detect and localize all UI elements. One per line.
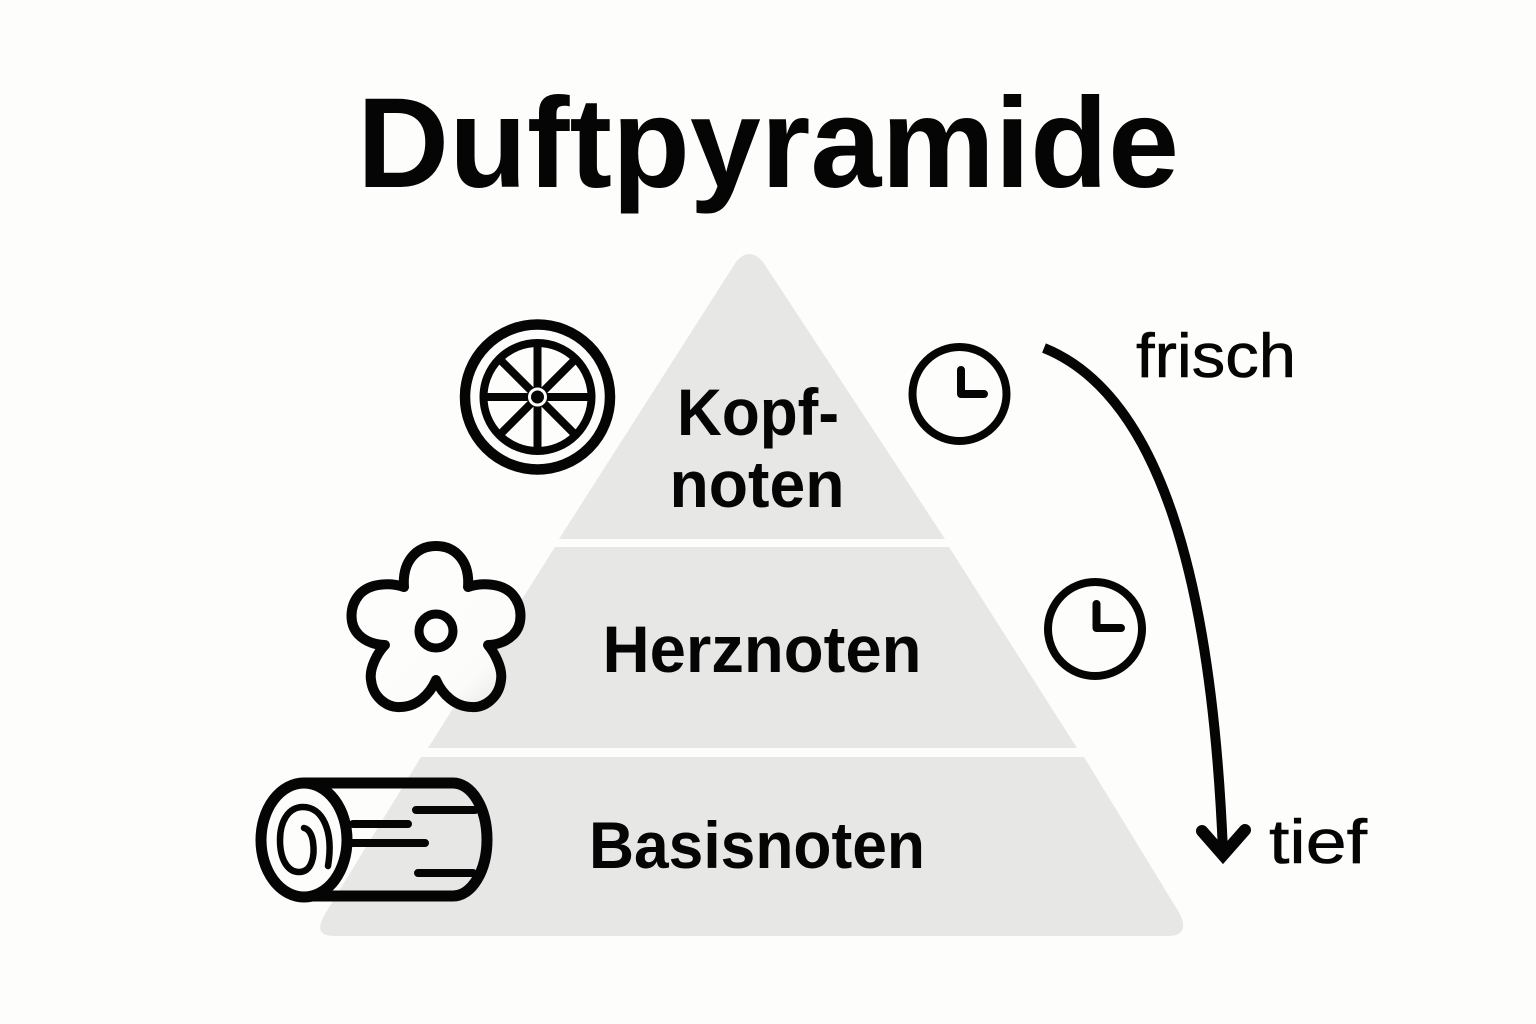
pyramid tier: Kopfnoten — [559, 254, 945, 539]
icon: clock middle — [1048, 582, 1142, 676]
icon: wood log — [261, 783, 487, 897]
pyramid tier: Herznoten — [428, 547, 1077, 748]
label: frisch: frisch — [1136, 322, 1296, 391]
icon: clock top — [912, 347, 1006, 441]
pyramid — [320, 254, 1183, 936]
label: Basisnoten: Basisnoten — [589, 808, 925, 882]
label: Herznoten: Herznoten — [602, 612, 922, 686]
pyramid tier: Basisnoten — [320, 757, 1183, 936]
label: Kopfnoten: noten — [670, 447, 844, 521]
icon: flower — [352, 546, 520, 707]
title: Duftpyramide — [357, 72, 1179, 215]
icon: citrus slice — [465, 324, 610, 470]
arrow: fresh to deep — [1044, 348, 1245, 855]
label: Kopfnoten — [670, 375, 844, 521]
label: tief: tief — [1269, 808, 1368, 877]
label: Kopfnoten: Kopf- — [677, 375, 839, 449]
